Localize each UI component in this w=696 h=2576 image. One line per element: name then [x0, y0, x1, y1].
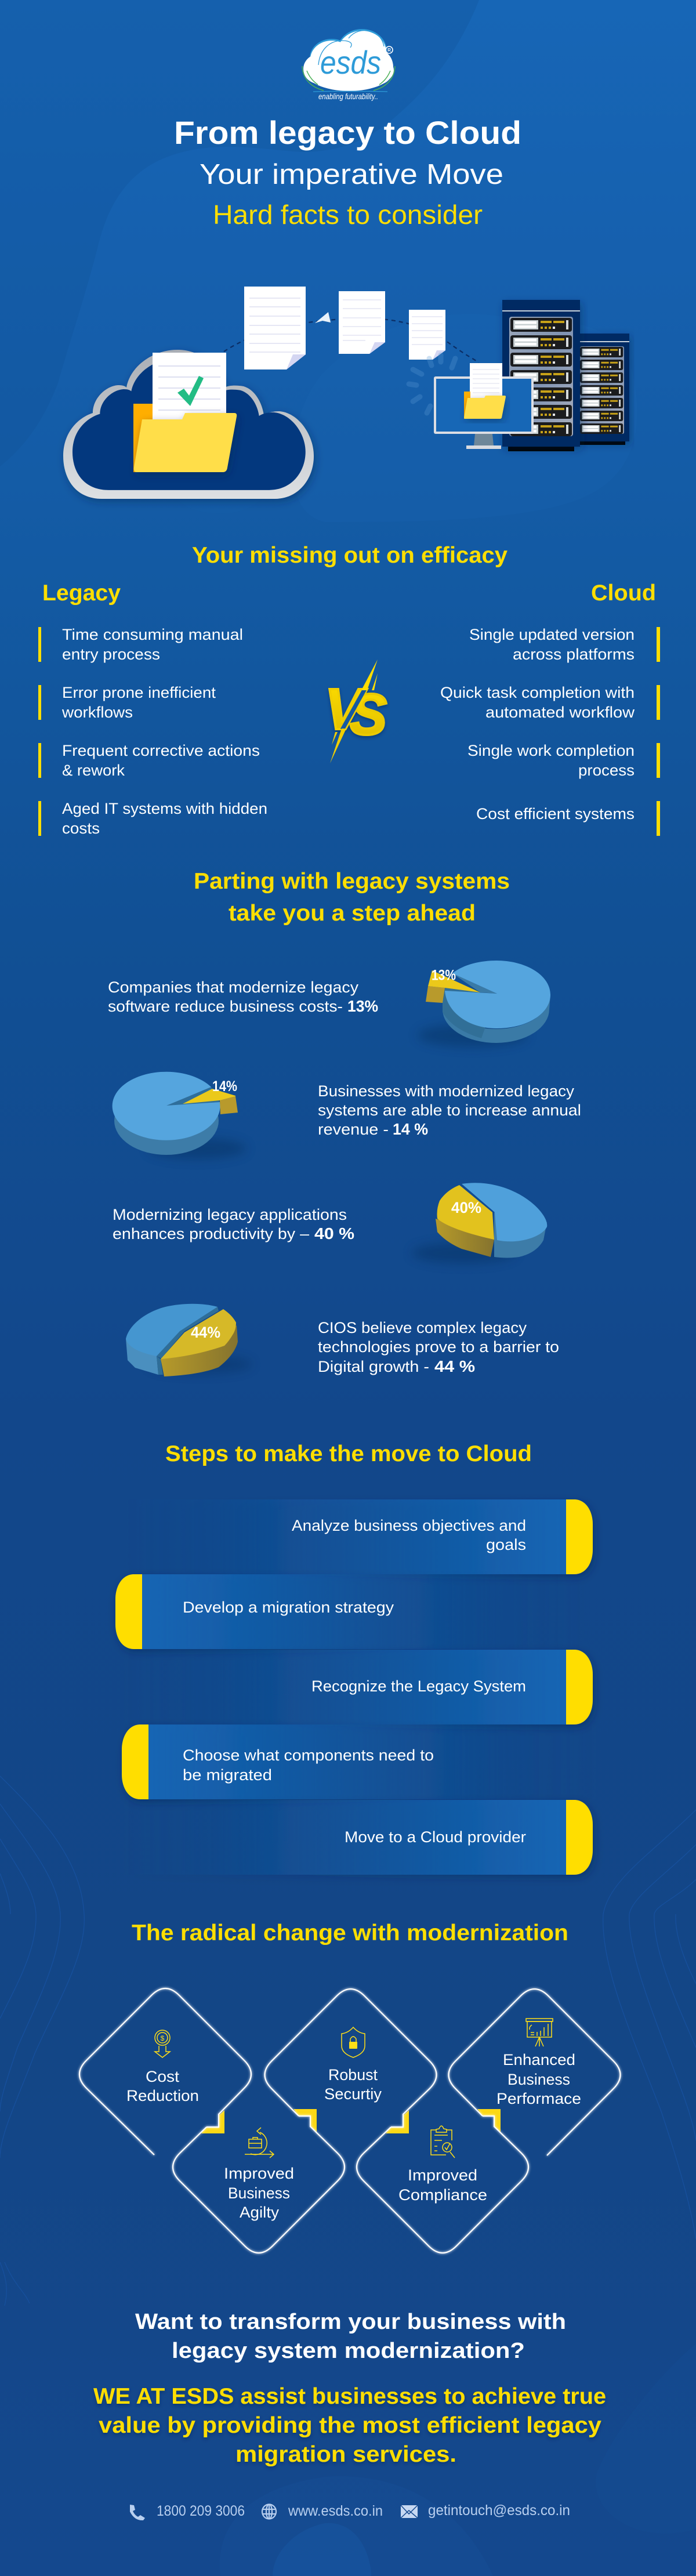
- VS emblem: S: [350, 682, 387, 747]
- cloud item 2: Quick task completion with: [440, 684, 635, 701]
- paper plane: [315, 312, 331, 323]
- text: Modernizing legacy applications: [113, 1206, 347, 1223]
- benefit: improved compliance: [357, 2116, 528, 2253]
- text: systems are able to increase annual: [318, 1102, 581, 1119]
- monitor with folder: [434, 363, 534, 449]
- pie chart 14 percent: [113, 1072, 246, 1159]
- legacy item 2: [38, 684, 216, 721]
- VS emblem: V: [325, 677, 367, 742]
- dashed path between systems: [224, 318, 479, 364]
- legacy item 3: & rework: [62, 762, 125, 779]
- step 1: Analyze business objectives and: [292, 1517, 526, 1534]
- heading: steps: Steps to make the move to Cloud: [165, 1441, 532, 1466]
- subtitle: Your imperative Move: [200, 159, 503, 190]
- benefit: improved business agility: Agilty: [240, 2204, 280, 2221]
- text: 13%: [347, 997, 378, 1015]
- benefit: enhanced business performance: [449, 1989, 621, 2155]
- icon: presentation board: [526, 2019, 553, 2046]
- cloud with folder: [63, 350, 314, 499]
- benefits diamonds: [79, 1988, 621, 2253]
- step 1: goals: [486, 1536, 526, 1553]
- icon: shield with lock: [342, 2027, 365, 2057]
- stat: reduce costs 13%: [108, 961, 550, 1047]
- step 3: [122, 1650, 593, 1724]
- benefit: enhanced business performance: Performace: [496, 2090, 581, 2107]
- text: 14 %: [393, 1120, 428, 1138]
- panel: legacy column: [38, 581, 267, 837]
- pie chart 40 percent: [412, 1183, 547, 1263]
- benefit: improved business agility: Improved: [224, 2165, 294, 2182]
- text: 40 %: [314, 1224, 354, 1242]
- icon: globe: [262, 2504, 276, 2519]
- step 4: [122, 1724, 599, 1799]
- cloud heading: Cloud: [591, 581, 656, 606]
- logo: esds: [320, 44, 381, 81]
- stat: barrier to growth 44%: [126, 1304, 559, 1376]
- step 2: [115, 1574, 586, 1649]
- loading spinner: [409, 355, 455, 413]
- legacy item 4: costs: [62, 820, 100, 837]
- text: enhances productivity by –: [113, 1225, 309, 1242]
- logo: [302, 29, 395, 101]
- icon: briefcase in cycle: [245, 2128, 274, 2158]
- legacy heading: Legacy: [42, 581, 121, 606]
- benefit: cost reduction: [79, 1988, 251, 2155]
- legacy item 1: [38, 626, 243, 663]
- text: software reduce business costs-: [108, 998, 343, 1015]
- call to action question: Want to transform your business with: [135, 2310, 566, 2334]
- ESDS value statement: [93, 2384, 606, 2467]
- stat: productivity 40%: [113, 1183, 547, 1263]
- website: www.esds.co.in: [288, 2503, 383, 2519]
- heading: parting with legacy systems: Parting with legacy systems: [194, 869, 510, 894]
- document large: [244, 287, 306, 369]
- text: 44 %: [434, 1357, 475, 1375]
- step 5: Move to a Cloud provider: [345, 1828, 526, 1846]
- ESDS value statement: WE AT ESDS assist businesses to achieve true: [93, 2384, 606, 2409]
- cloud item 3: process: [578, 762, 635, 779]
- stat: increase revenue 14%: [113, 1072, 581, 1159]
- legacy item 4: [38, 800, 267, 837]
- ESDS value statement: value by providing the most efficient legacy: [99, 2413, 601, 2438]
- logo: enabling futurability..: [318, 92, 378, 101]
- title: From legacy to Cloud: [174, 114, 521, 151]
- text: Digital growth -: [318, 1358, 429, 1375]
- pie chart 14 percent: 14%: [212, 1078, 237, 1095]
- benefit: cost reduction: Cost: [146, 2068, 180, 2085]
- step 5: [122, 1800, 593, 1875]
- steps stack: [115, 1499, 599, 1875]
- legacy item 1: Time consuming manual: [62, 626, 243, 643]
- pie chart 13 percent: 13%: [432, 968, 456, 984]
- text: [318, 1082, 581, 1138]
- contact bar: [130, 2502, 570, 2520]
- icon: clipboard with magnifier: [431, 2126, 455, 2158]
- text: [113, 1206, 354, 1242]
- logo: R: [387, 48, 391, 53]
- document small: [409, 310, 445, 360]
- email: getintouch@esds.co.in: [428, 2502, 570, 2519]
- text: Businesses with modernized legacy: [318, 1082, 575, 1100]
- benefit: robust security: [264, 1989, 436, 2127]
- text: [318, 1319, 559, 1375]
- pie chart 44 percent: 44%: [191, 1324, 220, 1341]
- text: revenue -: [318, 1121, 389, 1138]
- panel: cloud column: [440, 581, 660, 836]
- call to action question: legacy system modernization?: [172, 2339, 525, 2363]
- icon: envelope: [401, 2505, 418, 2518]
- step 2: Develop a migration strategy: [183, 1599, 394, 1616]
- call to action question: [135, 2310, 566, 2363]
- illustration: migration from server to cloud: [63, 287, 629, 499]
- pie chart 44 percent: [126, 1304, 252, 1376]
- icon: coin with down arrow: $: [161, 2034, 165, 2042]
- step 4: be migrated: [183, 1766, 272, 1784]
- pie chart 13 percent: [418, 961, 550, 1047]
- VS emblem: [325, 660, 387, 763]
- step 4: Choose what components need to: [183, 1747, 434, 1764]
- benefit: robust security: Robust: [328, 2066, 378, 2084]
- document medium: [339, 291, 385, 354]
- heading: parting with legacy systems: [194, 869, 510, 926]
- text: [108, 979, 378, 1015]
- text: Companies that modernize legacy: [108, 979, 359, 996]
- cloud item 3: Single work completion: [467, 742, 635, 759]
- legacy item 3: Frequent corrective actions: [62, 742, 260, 759]
- benefit: improved compliance: Compliance: [398, 2186, 487, 2204]
- cloud item 4: Cost efficient systems: [476, 805, 635, 823]
- benefit: improved business agility: Business: [228, 2184, 290, 2202]
- legacy item 3: [38, 742, 260, 779]
- ESDS value statement: migration services.: [235, 2442, 456, 2467]
- legacy item 4: Aged IT systems with hidden: [62, 800, 267, 817]
- pie chart 40 percent: 40%: [451, 1199, 481, 1216]
- text: technologies prove to a barrier to: [318, 1338, 559, 1356]
- icon: phone: [130, 2505, 145, 2520]
- benefit: enhanced business performance: Enhanced: [503, 2051, 575, 2068]
- cloud item 1: [469, 626, 660, 663]
- server rack back: [580, 334, 629, 445]
- legacy item 2: workflows: [61, 704, 133, 721]
- benefit: robust security: Securtiy: [324, 2085, 382, 2103]
- cloud item 4: [476, 801, 660, 836]
- heading: radical change: The radical change with modernization: [132, 1921, 568, 1945]
- benefit: improved compliance: Improved: [408, 2166, 477, 2184]
- legacy item 1: entry process: [62, 646, 160, 663]
- cloud item 1: Single updated version: [469, 626, 635, 643]
- heading: efficacy: Your missing out on efficacy: [192, 543, 507, 568]
- yellow connector steps: [201, 2109, 501, 2133]
- text: CIOS believe complex legacy: [318, 1319, 527, 1336]
- cloud item 2: [440, 684, 660, 721]
- server rack front: [502, 300, 580, 451]
- benefit: improved business agility: [173, 2116, 345, 2253]
- step 3: Recognize the Legacy System: [311, 1678, 526, 1695]
- heading: parting with legacy systems: take you a step ahead: [229, 901, 476, 926]
- benefit: cost reduction: Reduction: [126, 2087, 199, 2104]
- step 1: [122, 1499, 593, 1574]
- cloud item 3: [467, 742, 660, 779]
- phone number: 1800 209 3006: [157, 2503, 245, 2519]
- cloud item 1: across platforms: [513, 646, 635, 663]
- icon: coin with down arrow: [155, 2030, 170, 2057]
- legacy item 2: Error prone inefficient: [62, 684, 216, 701]
- benefit: enhanced business performance: Business: [507, 2071, 570, 2088]
- cloud item 2: automated workflow: [485, 704, 635, 721]
- tagline: Hard facts to consider: [213, 200, 483, 230]
